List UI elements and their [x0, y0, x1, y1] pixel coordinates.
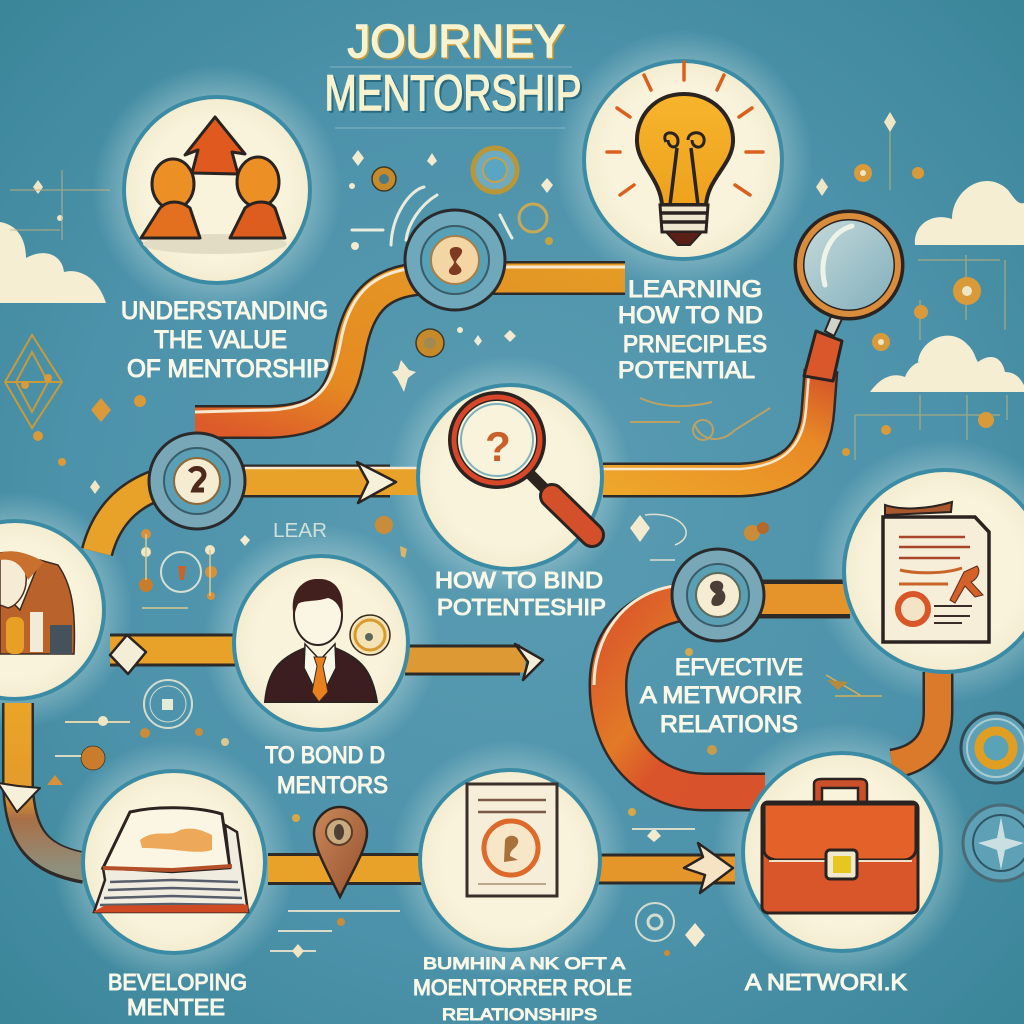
text: effective relations — [640, 654, 803, 738]
text: developing mentee — [108, 969, 247, 1020]
arrow: vertical route — [0, 783, 40, 812]
node: left step — [149, 433, 245, 529]
node: right step — [672, 549, 764, 641]
path: middle left route — [110, 634, 235, 666]
text: effective relations: EFVECTIVE — [675, 654, 803, 681]
circle panel: man in suit — [234, 556, 408, 730]
text: understanding the value: UNDERSTANDING — [121, 297, 328, 325]
decorative clouds — [0, 181, 1024, 392]
left sparkles — [33, 180, 148, 494]
text: a network: A NETWORI.K — [745, 969, 908, 995]
text: mentor role relationships — [413, 954, 632, 1024]
text: learning how to: POTENTIAL — [618, 357, 755, 384]
text: mentor role relationships: BUMHIN A NK OFT A — [423, 954, 626, 973]
title: JOURNEY — [349, 16, 566, 68]
icon: mentor in suit — [265, 579, 390, 702]
circle panel: profile document — [420, 770, 600, 950]
text: understanding the value: OF MENTORSHIP — [127, 355, 329, 383]
icon: open book — [94, 808, 248, 912]
text: mentor role relationships: MOENTORRER ROLE — [413, 975, 632, 1000]
text: learning how to — [618, 276, 767, 384]
text: lear: LEAR — [273, 520, 327, 542]
text: effective relations: A METWORIR — [640, 682, 802, 709]
icon: coin — [350, 615, 390, 655]
text: learning how to: PRNECIPLES — [623, 331, 767, 358]
path: middle right route — [405, 644, 525, 676]
cloud: top right — [915, 181, 1024, 245]
circle panel: briefcase — [743, 753, 941, 951]
title: MENTORSHIP — [326, 67, 584, 123]
path: upper orange route — [195, 267, 625, 422]
icon: bag and student — [0, 551, 74, 654]
title — [324, 15, 584, 128]
icon: right gear badge — [961, 713, 1024, 783]
text: learning how to: HOW TO ND — [618, 302, 763, 329]
node: top step — [405, 210, 505, 310]
path: route to the large magnifier — [603, 370, 821, 480]
title: JOURNEY — [348, 15, 564, 67]
icon: document with badge — [467, 784, 557, 896]
path: lower right connector — [892, 672, 938, 764]
path: vertical left route — [18, 703, 90, 868]
network lines on the right — [855, 118, 1007, 460]
text: learning how to: LEARNING — [628, 276, 762, 303]
title: MENTORSHIP — [324, 65, 582, 121]
ring: top — [473, 148, 517, 192]
path: left node route — [97, 468, 420, 552]
sparkles under learning text — [630, 398, 770, 440]
text: effective relations: RELATIONS — [660, 711, 798, 738]
icon: briefcase — [762, 779, 918, 913]
circle panel: document — [844, 470, 1024, 672]
mid right small marks — [685, 629, 882, 755]
text: mentor role relationships: RELATIONSHIPS — [442, 1005, 597, 1024]
text: to bond mentors — [265, 742, 388, 799]
icon: magnifier with question mark — [453, 396, 592, 535]
small coin: top — [372, 167, 396, 191]
circle panel: lightbulb — [584, 61, 782, 259]
arrow: middle right tip — [515, 644, 543, 680]
cloud: middle right — [870, 336, 1024, 392]
text: how to bind — [435, 567, 606, 620]
icon: location pin — [314, 807, 367, 897]
circle panel: magnifier with question — [418, 385, 602, 569]
lower right sparkles — [628, 808, 705, 956]
coin: below node — [416, 329, 444, 357]
sparkles near mid right — [630, 514, 769, 560]
arrow: diamond on middle left route — [110, 635, 146, 674]
icon: magnifier with question mark: ? — [485, 423, 511, 470]
icon: two people with arrow — [141, 117, 285, 238]
path: bottom center route — [268, 853, 422, 885]
icon: right compass badge — [963, 805, 1024, 881]
text: understanding the value — [121, 297, 329, 383]
left column sparkles under node — [139, 516, 407, 608]
left diamond decoration — [5, 335, 62, 428]
text: developing mentee: MENTEE — [127, 994, 225, 1020]
text: how to bind: HOW TO BIND — [435, 567, 603, 593]
text: how to bind: POTENTESHIP — [437, 594, 606, 620]
left lower sparkles — [47, 680, 300, 822]
ring: small gold — [519, 204, 553, 245]
stippled ground — [143, 234, 287, 254]
icon: document with ribbon — [883, 502, 989, 642]
icon: large magnifying glass — [799, 215, 899, 381]
arrow: bottom right route — [684, 843, 733, 893]
circle panel: understanding mentorship — [124, 97, 310, 283]
sparkles top center — [349, 150, 553, 392]
arrow: left node route — [357, 462, 396, 503]
text: understanding the value: THE VALUE — [154, 326, 287, 354]
lower center lines — [270, 911, 400, 958]
path: bottom right route — [598, 854, 735, 884]
path: right looping route — [594, 585, 850, 792]
icon: lightbulb — [607, 62, 763, 245]
signal arcs — [352, 187, 512, 245]
circle panel: open book — [83, 771, 265, 953]
cloud: left — [0, 222, 106, 303]
text: to bond mentors: MENTORS — [277, 772, 388, 799]
sparkle dots right — [842, 164, 994, 456]
text: developing mentee: BEVELOPING — [108, 969, 247, 995]
circle panel: backpack — [0, 521, 104, 699]
text: to bond mentors: TO BOND D — [265, 742, 385, 769]
